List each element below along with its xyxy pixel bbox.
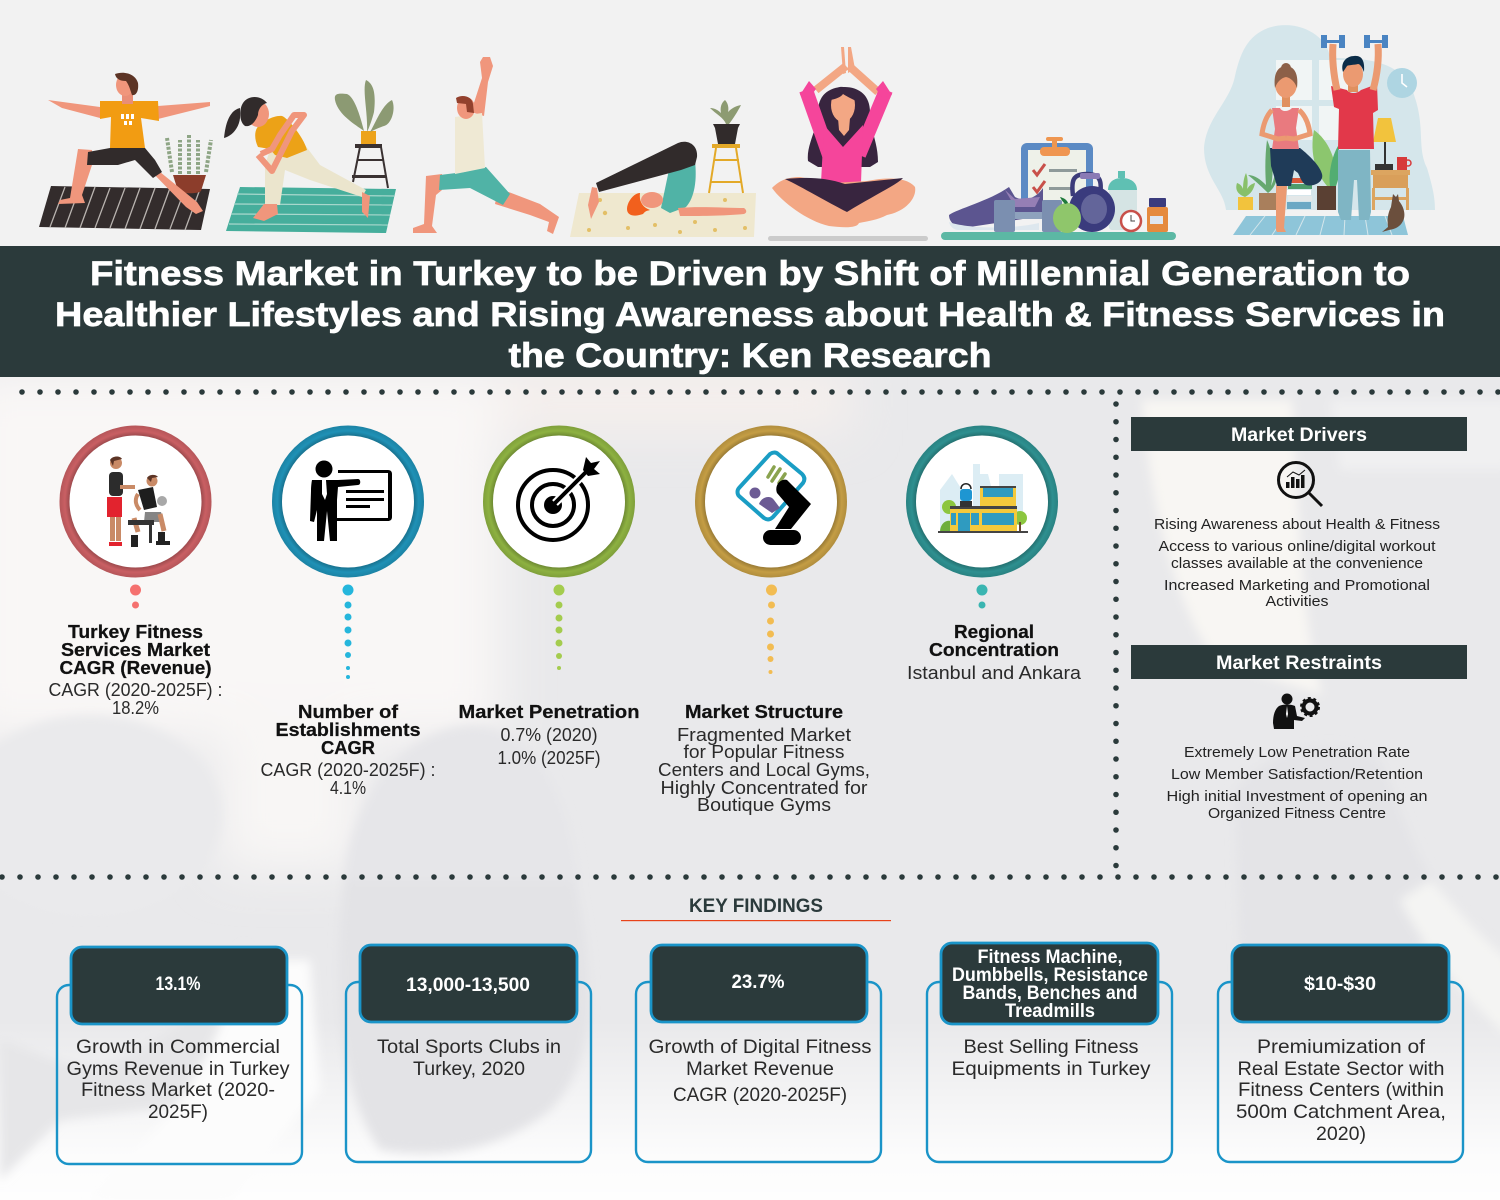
label: Turkey Fitness: [68, 621, 203, 642]
stool and plant: [335, 80, 394, 188]
panel: Turkey fitness services market CAGR: [48, 426, 222, 718]
card text: CAGR (2020-2025F): [673, 1084, 847, 1106]
title banner: the Country: Ken Research: [508, 337, 992, 375]
icon: trainer and athlete: [60, 426, 212, 578]
illustration: warrior pose man: [39, 73, 211, 230]
yoga mat: [1233, 216, 1408, 235]
card text: Gyms Revenue in Turkey: [66, 1058, 290, 1080]
label: [48, 621, 222, 718]
label: CAGR: [321, 737, 375, 758]
stat: equipment types: [941, 943, 1158, 1024]
card text: Turkey, 2020: [413, 1058, 525, 1080]
label: [907, 621, 1082, 683]
label: Concentration: [929, 639, 1059, 660]
plant: [167, 135, 211, 193]
card text: [66, 1036, 290, 1123]
heading: market drivers: Market Drivers: [1231, 425, 1367, 446]
cat: [1382, 194, 1404, 232]
connector dots: [554, 584, 564, 670]
label: Fragmented Market: [677, 725, 851, 745]
stat: 23.7%: [651, 945, 867, 1022]
title banner: Fitness Market in Turkey to be Driven by Shift of Millennial Generation to: [90, 255, 1410, 293]
icon: target with arrow: [483, 426, 635, 578]
label: [458, 701, 640, 768]
illustration: lunge man: [413, 57, 559, 234]
heading: key findings: KEY FINDINGS: [689, 896, 823, 917]
card: commercial gyms growth: [57, 947, 302, 1164]
illustration: fitness equipment: [941, 137, 1176, 240]
card text: Growth in Commercial: [76, 1036, 280, 1058]
panel: market penetration: [458, 426, 640, 768]
icon: gym building: [906, 426, 1058, 578]
text: restraints list: Low Member Satisfaction/Retention: [1171, 766, 1423, 783]
card text: 2020): [1316, 1123, 1366, 1145]
card: total sports clubs: [346, 945, 591, 1162]
card: best selling equipment: [927, 943, 1172, 1162]
stat: equipment types: Dumbbells, Resistance: [952, 965, 1148, 986]
card text: Total Sports Clubs in: [377, 1036, 561, 1058]
card text: Best Selling Fitness: [964, 1036, 1139, 1058]
stat: 13.1%: 13.1%: [156, 974, 201, 995]
label: Regional: [954, 621, 1034, 642]
connector dots: [342, 584, 354, 679]
illustration: meditating woman: [768, 47, 928, 241]
card text: Fitness Market (2020-: [81, 1079, 275, 1101]
card text: 2025F): [148, 1101, 208, 1123]
panel: market drivers: [1131, 417, 1467, 610]
icon: card in hand: [695, 426, 847, 578]
text: drivers list: Increased Marketing and Promotional: [1164, 577, 1430, 594]
card text: Growth of Digital Fitness: [648, 1036, 872, 1058]
connector dots: [766, 584, 777, 674]
label: for Popular Fitness: [684, 742, 844, 762]
label: Highly Concentrated for: [660, 778, 868, 798]
panel: market restraints: [1131, 645, 1467, 822]
panel: number of establishments CAGR: [260, 426, 436, 798]
illustration: side stretch woman: [224, 80, 396, 233]
connector dots: [130, 584, 141, 608]
label: Boutique Gyms: [697, 795, 831, 815]
stat: equipment types: Fitness Machine,: [978, 947, 1122, 968]
label: [260, 701, 436, 798]
side table lamp and mug: [1371, 118, 1411, 210]
label: Services Market: [61, 639, 210, 660]
label: Number of: [298, 701, 399, 722]
text: restraints list: Extremely Low Penetration Rate: [1184, 744, 1410, 761]
label: CAGR (Revenue): [60, 657, 212, 678]
stat: equipment types: Treadmills: [1005, 1001, 1095, 1022]
page background: [0, 377, 1500, 1200]
text: restraints list: Organized Fitness Centre: [1208, 805, 1386, 822]
title banner: [0, 246, 1500, 377]
icon: magnifier over chart: [1278, 462, 1322, 506]
stat: 13,000-13,500: [360, 945, 577, 1022]
panel: regional concentration: [906, 426, 1082, 683]
label: Market Penetration: [458, 701, 640, 722]
text: drivers list: classes available at the convenience: [1171, 555, 1423, 572]
label: Istanbul and Ankara: [907, 663, 1082, 683]
text: restraints list: [1166, 744, 1428, 822]
label: 18.2%: [112, 698, 159, 718]
card: real estate premiumization: [1218, 945, 1463, 1162]
card text: Equipments in Turkey: [952, 1058, 1151, 1080]
label: CAGR (2020-2025F) :: [260, 760, 436, 780]
card text: [648, 1036, 872, 1106]
label: Market Structure: [685, 701, 843, 722]
stat: 13.1%: [71, 947, 287, 1024]
heading: market restraints: Market Restraints: [1216, 653, 1382, 674]
text: drivers list: Rising Awareness about Health & Fitness: [1154, 516, 1440, 533]
icon: businessman with gear: [1273, 694, 1319, 729]
card text: Market Revenue: [686, 1058, 834, 1080]
panel: market structure: [658, 426, 870, 815]
stat: 13,000-13,500: 13,000-13,500: [406, 975, 530, 996]
label: Establishments: [276, 719, 420, 740]
card: digital fitness growth: [636, 945, 881, 1162]
card text: [377, 1036, 561, 1080]
stat: $10-$30: $10-$30: [1304, 974, 1376, 995]
stat: 23.7%: 23.7%: [732, 972, 785, 993]
label: Centers and Local Gyms,: [658, 760, 870, 780]
card text: Premiumization of: [1257, 1036, 1426, 1058]
heading: market drivers: [1131, 417, 1467, 451]
stool and plant: [709, 100, 743, 193]
text: drivers list: Access to various online/digital workout: [1158, 538, 1436, 555]
potted plants: [1236, 130, 1340, 210]
stat: equipment types: Bands, Benches and: [962, 983, 1138, 1004]
card text: 500m Catchment Area,: [1236, 1101, 1446, 1123]
heading: market restraints: [1131, 645, 1467, 679]
illustration: couple exercising at home: [1204, 25, 1435, 235]
text: drivers list: Activities: [1266, 593, 1328, 610]
title banner: Healthier Lifestyles and Rising Awareness about Health & Fitness Services in: [55, 296, 1445, 334]
illustration: plough pose woman: [570, 100, 756, 237]
label: 0.7% (2020): [500, 725, 598, 745]
card text: [1236, 1036, 1446, 1145]
card text: [952, 1036, 1151, 1080]
wall clock: [1387, 68, 1417, 98]
icon: presenter with board: [272, 426, 424, 578]
stat: $10-$30: [1232, 945, 1449, 1022]
woman in tree pose: [1262, 63, 1322, 232]
connector dots: [976, 584, 988, 608]
man lifting dumbbells: [1321, 35, 1388, 220]
label: CAGR (2020-2025F) :: [48, 680, 222, 700]
label: 4.1%: [330, 778, 366, 798]
text: drivers list: [1154, 516, 1440, 610]
card text: Fitness Centers (within: [1238, 1079, 1444, 1101]
label: 1.0% (2025F): [498, 748, 600, 768]
card text: Real Estate Sector with: [1238, 1058, 1444, 1080]
label: [658, 701, 870, 815]
text: restraints list: High initial Investment of opening an: [1166, 788, 1428, 805]
